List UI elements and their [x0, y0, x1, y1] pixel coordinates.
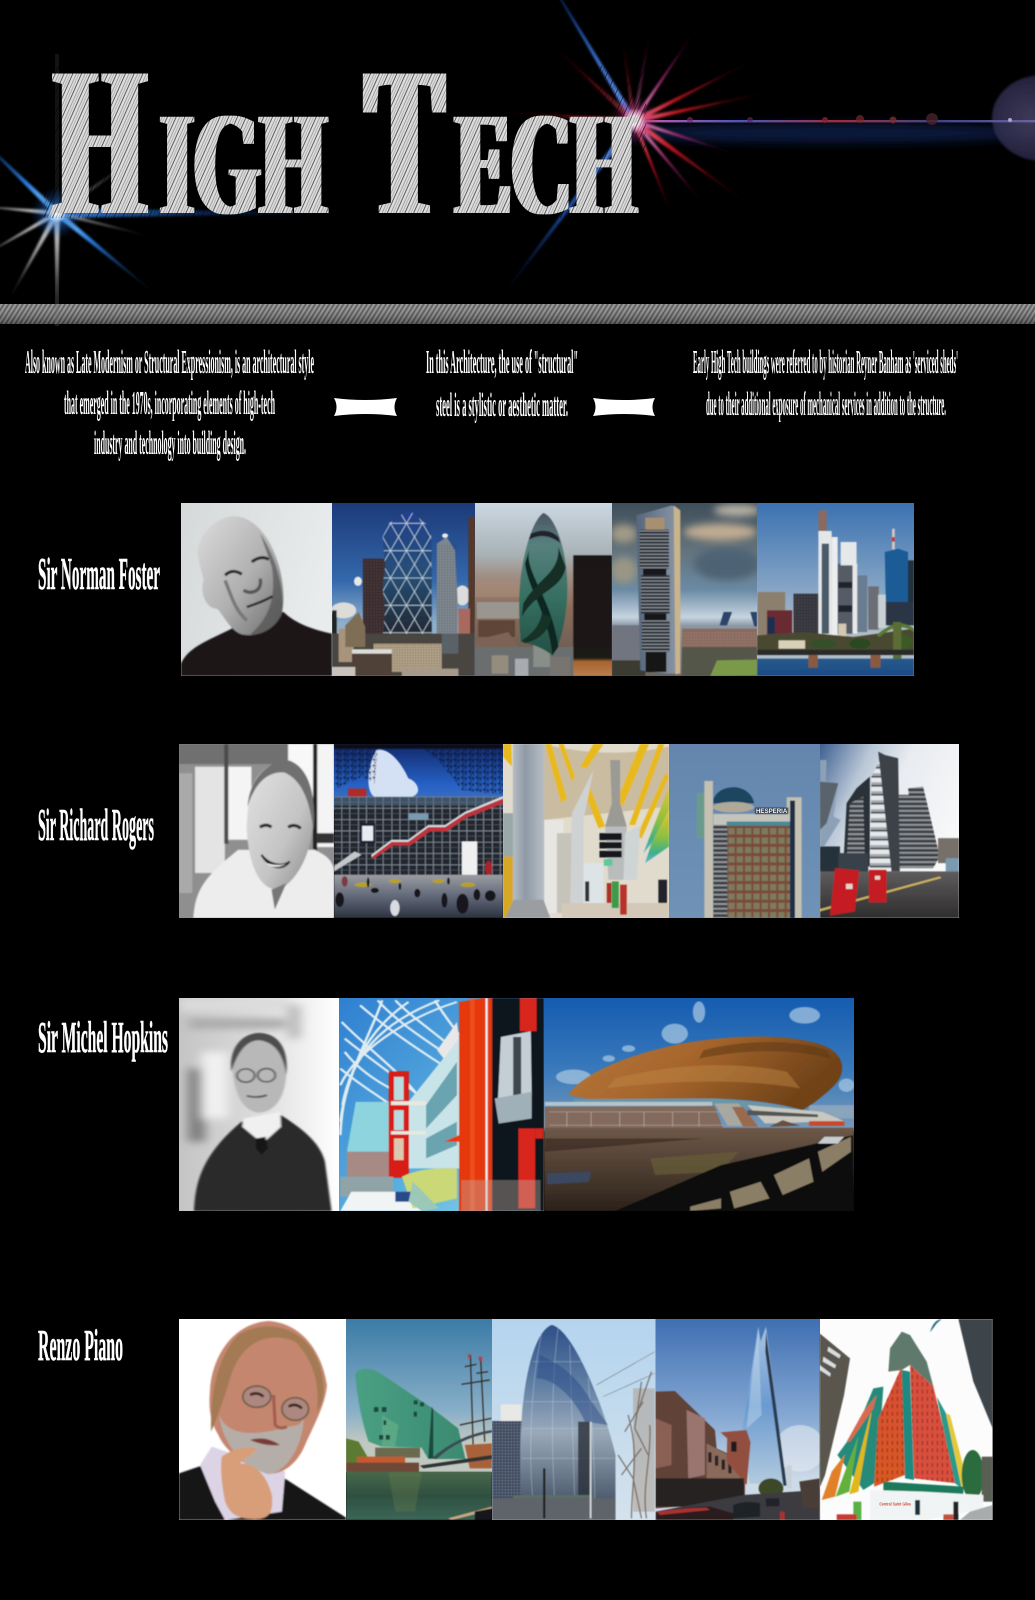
- hotel sign text: HESPERIA: [756, 808, 788, 815]
- panel: introduction text: [25, 344, 958, 462]
- title: [54, 24, 636, 260]
- title: H: [54, 24, 146, 260]
- panel: Renzo Piano row: Renzo Piano: [38, 1321, 123, 1370]
- panel: introduction text: industry and technology into building design.: [94, 425, 246, 462]
- photo: portrait of Richard Rogers: [179, 744, 334, 918]
- photo: Hesperia Tower Barcelona: [669, 744, 820, 918]
- title: T: [366, 24, 444, 260]
- photo: red steel atrium with glass lift: [339, 998, 544, 1211]
- title: ECH: [456, 82, 636, 245]
- connector shape right: [593, 398, 655, 416]
- photo: curved glass building: [492, 1319, 656, 1520]
- panel: introduction text: that emerged in the 1970s, incorporating elements of high-tech: [64, 385, 275, 422]
- panel: Sir Norman Foster row: [38, 503, 914, 676]
- panel: introduction text: steel is a stylistic or aesthetic matter.: [436, 387, 568, 424]
- photo: Lloyd's building with red post boxes: [820, 744, 959, 918]
- photo: Torre Cepsa tower: [612, 503, 757, 676]
- panel: header with lens flares and title: [0, 0, 1035, 326]
- metallic divider band: [0, 304, 1035, 324]
- lens flare: right red and blue star: [484, 0, 1035, 295]
- photo: NEMO science museum and tall ship: [346, 1319, 492, 1520]
- panel: Sir Richard Rogers row: Sir Richard Rogers: [38, 799, 154, 850]
- text block: serviced sheds: [693, 344, 958, 423]
- text block: definition: [25, 344, 314, 462]
- photo: Central Saint Giles: [820, 1319, 993, 1520]
- panel: Sir Michel Hopkins row: [38, 998, 854, 1211]
- panel: Sir Norman Foster row: Sir Norman Foster: [38, 548, 160, 599]
- panel: Renzo Piano row: [38, 1319, 993, 1520]
- lens flare: left blue star: [0, 54, 357, 326]
- title: IGH: [160, 82, 326, 245]
- photo: Centre Pompidou: [334, 744, 503, 918]
- hoarding text: Central Saint Giles: [879, 1502, 911, 1507]
- photo: portrait of Renzo Piano: [179, 1319, 346, 1520]
- photo: The Shard, London: [656, 1319, 820, 1520]
- photo: Frankfurt skyline with Commerzbank Tower: [757, 503, 914, 676]
- panel: Sir Michel Hopkins row: Sir Michel Hopkins: [38, 1013, 168, 1062]
- photo: Hearst Tower: [332, 503, 475, 676]
- panel: Sir Richard Rogers row: [38, 744, 959, 918]
- photo: portrait of Michael Hopkins: [179, 998, 339, 1211]
- photo: 30 St Mary Axe gherkin: [475, 503, 612, 676]
- photo: Madrid Barajas airport terminal: [503, 744, 669, 918]
- text block: structural steel: [426, 344, 578, 424]
- connector shape left: [334, 398, 397, 416]
- photo: Olympic velodrome: [544, 998, 854, 1211]
- photo: portrait of Norman Foster: [181, 503, 332, 676]
